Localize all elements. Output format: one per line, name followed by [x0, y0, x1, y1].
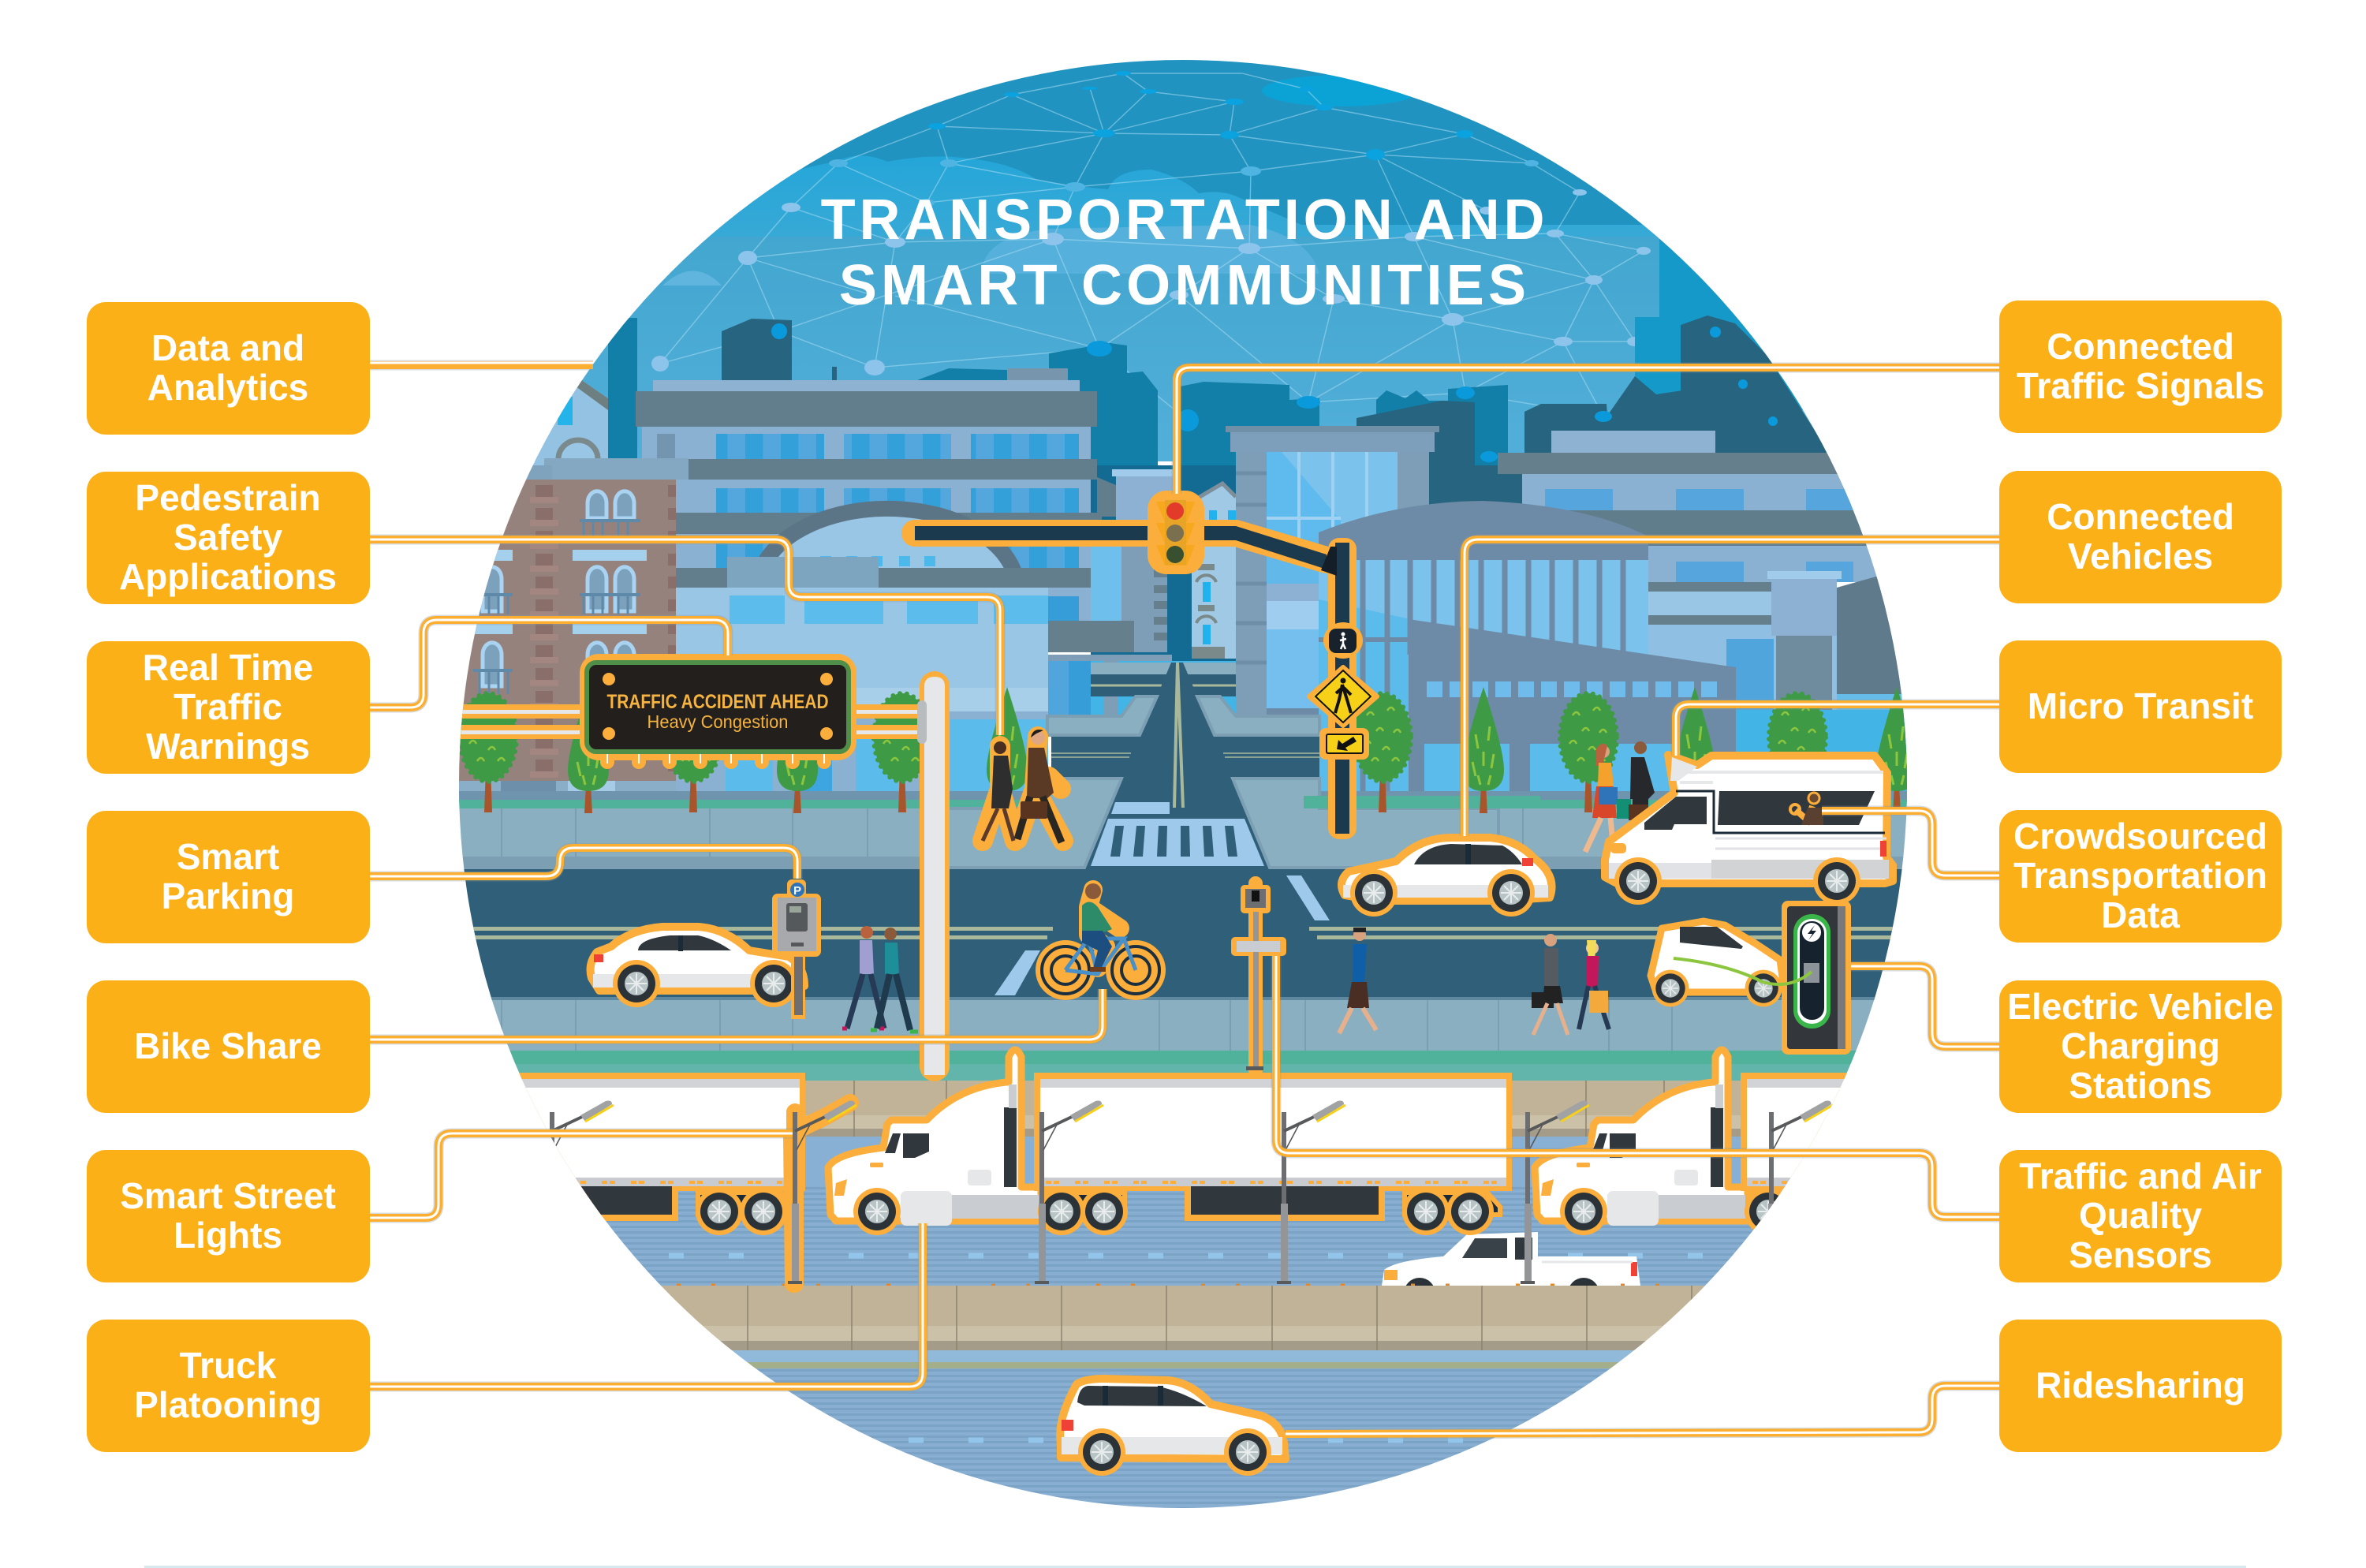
brick building windows: [483, 491, 634, 686]
air quality sensor: [1231, 883, 1286, 1070]
trees: [460, 687, 1917, 813]
label: Smart Parking: Parking: [162, 875, 294, 917]
highway and barriers: [522, 1081, 1843, 1136]
truck platoon: [327, 1050, 2366, 1235]
label: Real Time Traffic Warnings: Warnings: [146, 726, 310, 767]
pedestrians walking on near sidewalk: [842, 926, 1609, 1035]
label: Connected Vehicles: [1999, 471, 2282, 603]
label: Truck Platooning: Truck: [180, 1345, 277, 1386]
label: Real Time Traffic Warnings: [87, 641, 370, 774]
label: Crowdsourced Transportation Data: [1999, 810, 2282, 943]
label: Connected Traffic Signals: Traffic Signals: [2017, 365, 2264, 406]
label: Crowdsourced Transportation Data: Data: [2101, 894, 2180, 935]
connected traffic signal: [915, 491, 1357, 839]
electric vehicle: [1651, 921, 1784, 1006]
label: Traffic and Air Quality Sensors: [1999, 1150, 2282, 1282]
label: Pedestrain Safety Applications: Safety: [174, 517, 282, 558]
title: SMART COMMUNITIES: [839, 254, 1530, 317]
label: Electric Vehicle Charging Stations: Electric Vehicle: [2007, 986, 2274, 1027]
far cross street: [1091, 663, 1236, 696]
leader: connected traffic signals: [1177, 368, 1999, 494]
barrier cones: [677, 1284, 1659, 1286]
scene: circular city illustration: [459, 60, 1907, 1508]
label: Pedestrain Safety Applications: [87, 472, 370, 604]
micro transit van: [1605, 755, 1893, 905]
left house behind brick: [529, 380, 608, 473]
skyline silhouettes: [608, 318, 1508, 465]
label: Data and Analytics: Data and: [151, 327, 304, 368]
label: Traffic and Air Quality Sensors: Traffic and Air: [2019, 1155, 2262, 1197]
pedestrians near crosswalk: [983, 730, 1063, 842]
central backdrop: [1091, 465, 1236, 661]
leader: crowdsourced data: [1822, 811, 1999, 875]
backdrop behind arched building: [1429, 465, 1522, 505]
connected hatchback: [1342, 838, 1552, 917]
traffic warning sign: [580, 654, 856, 769]
leader: connected vehicles: [1465, 539, 1999, 836]
sign gantry pole: [920, 671, 950, 1081]
ground layers: [450, 791, 1916, 802]
label: Truck Platooning: Platooning: [134, 1384, 322, 1425]
label: Connected Traffic Signals: [1999, 301, 2282, 433]
mid district: [676, 588, 1048, 694]
label: Electric Vehicle Charging Stations: Charging: [2061, 1025, 2220, 1066]
parked sedan: [591, 927, 804, 1007]
label: Traffic and Air Quality Sensors: Sensors: [2069, 1234, 2212, 1275]
label: Traffic and Air Quality Sensors: Quality: [2079, 1195, 2202, 1236]
label: Electric Vehicle Charging Stations: Stations: [2069, 1065, 2212, 1106]
traffic warning sign: Heavy Congestion: [647, 711, 789, 732]
rideshare SUV: [1060, 1379, 1286, 1476]
leader: EV charging: [1851, 966, 1999, 1047]
smart parking meter: [772, 879, 821, 1019]
network nodes: [651, 189, 1651, 375]
title: [821, 189, 1548, 317]
label: Micro Transit: [1999, 640, 2282, 773]
EV charging station: [1674, 901, 1851, 1055]
pedestrian signal: [1323, 622, 1363, 659]
glass tower: [1226, 426, 1439, 716]
label: Ridesharing: Ridesharing: [2036, 1365, 2245, 1406]
label: Real Time Traffic Warnings: Traffic: [174, 686, 282, 727]
label: Data and Analytics: [87, 302, 370, 435]
label: Real Time Traffic Warnings: Real Time: [143, 647, 313, 688]
title: TRANSPORTATION AND: [821, 189, 1548, 252]
data network: [660, 73, 1644, 420]
smart parking meter: P: [793, 884, 801, 898]
central road: [1051, 663, 1319, 869]
label: Smart Street Lights: Smart Street: [120, 1175, 336, 1216]
leader: ridesharing: [1286, 1386, 1999, 1434]
pedestrians near van: [1585, 741, 1655, 852]
traffic warning sign: TRAFFIC ACCIDENT AHEAD: [607, 691, 828, 713]
arched glass building: [1319, 501, 1648, 560]
leader: truck platooning: [369, 1223, 923, 1387]
main building block: [653, 380, 1080, 391]
label: Pedestrain Safety Applications: Applications: [119, 556, 337, 597]
front wedge: [1409, 619, 1736, 800]
bottom rule: [144, 1566, 2246, 1568]
label: Smart Parking: [87, 811, 370, 943]
label: Smart Street Lights: [87, 1150, 370, 1282]
label: Electric Vehicle Charging Stations: [1999, 980, 2282, 1113]
label: Crowdsourced Transportation Data: Crowdsourced: [2013, 816, 2267, 857]
corner sidewalks: [946, 696, 1498, 868]
arrow plaque: [1319, 728, 1369, 760]
smart street lights: [545, 1101, 1833, 1284]
label: Crowdsourced Transportation Data: Transportation: [2013, 855, 2267, 896]
sky: [535, 60, 1831, 461]
crowdsourcing passenger: [1790, 793, 1823, 825]
crosswalk: [1091, 819, 1264, 866]
label: Connected Vehicles: Vehicles: [2068, 536, 2213, 577]
clouds: [662, 225, 1319, 286]
pickup truck: [1382, 1232, 1640, 1286]
label: Connected Traffic Signals: Connected: [2047, 326, 2234, 367]
leader: micro transit: [1676, 704, 1999, 756]
right buildings: [1551, 431, 1715, 453]
label: Smart Parking: Smart: [177, 836, 279, 877]
label: Bike Share: Bike Share: [134, 1025, 322, 1066]
label: Data and Analytics: Analytics: [147, 367, 308, 408]
townhouse behind signal: [1192, 483, 1236, 659]
label: Ridesharing: [1999, 1320, 2282, 1452]
label: Smart Street Lights: Lights: [174, 1215, 282, 1256]
lane lines: [465, 929, 1909, 937]
label: Connected Vehicles: Connected: [2047, 496, 2234, 537]
pedestrian crossing sign: [1309, 667, 1377, 726]
leader: smart parking: [369, 848, 797, 879]
sidewalk joints: [502, 808, 1672, 1051]
leader: smart street lights: [369, 1133, 793, 1218]
network nodes over skyline: [771, 323, 1778, 462]
central tower: [1048, 469, 1236, 716]
label: Pedestrain Safety Applications: Pedestrain: [135, 477, 321, 518]
leader: data and analytics: [369, 363, 593, 365]
leader: pedestrian safety: [369, 539, 1000, 735]
leader: bike share: [369, 989, 1103, 1040]
label: Bike Share: [87, 980, 370, 1113]
sign arms: [450, 700, 927, 744]
leader: real time traffic: [369, 620, 728, 707]
cyclist: [1036, 883, 1166, 1000]
label: Truck Platooning: [87, 1320, 370, 1452]
label: Micro Transit: Micro Transit: [2028, 685, 2253, 726]
leader: traffic and air quality: [1276, 956, 1999, 1217]
brick building: [450, 480, 676, 783]
